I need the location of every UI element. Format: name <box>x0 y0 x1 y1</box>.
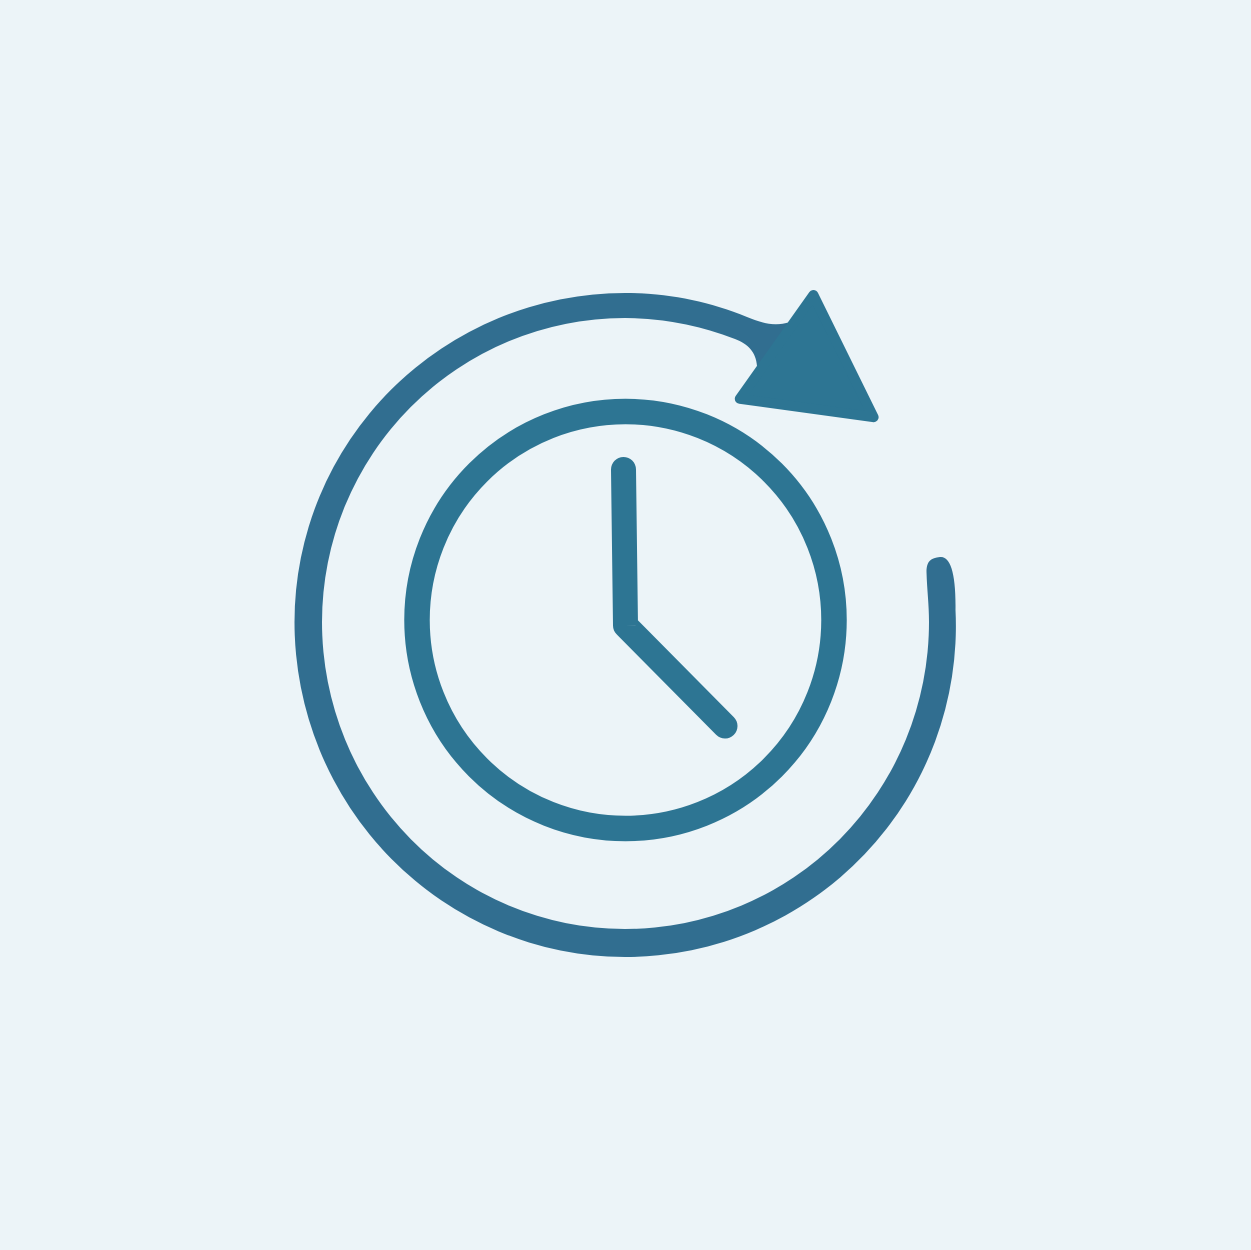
arrowhead <box>740 295 874 417</box>
clock face ring <box>417 412 834 828</box>
arrow shaft ring <box>294 293 956 957</box>
clock hands <box>624 470 725 726</box>
arrow: circular sweep around clock <box>294 293 956 957</box>
